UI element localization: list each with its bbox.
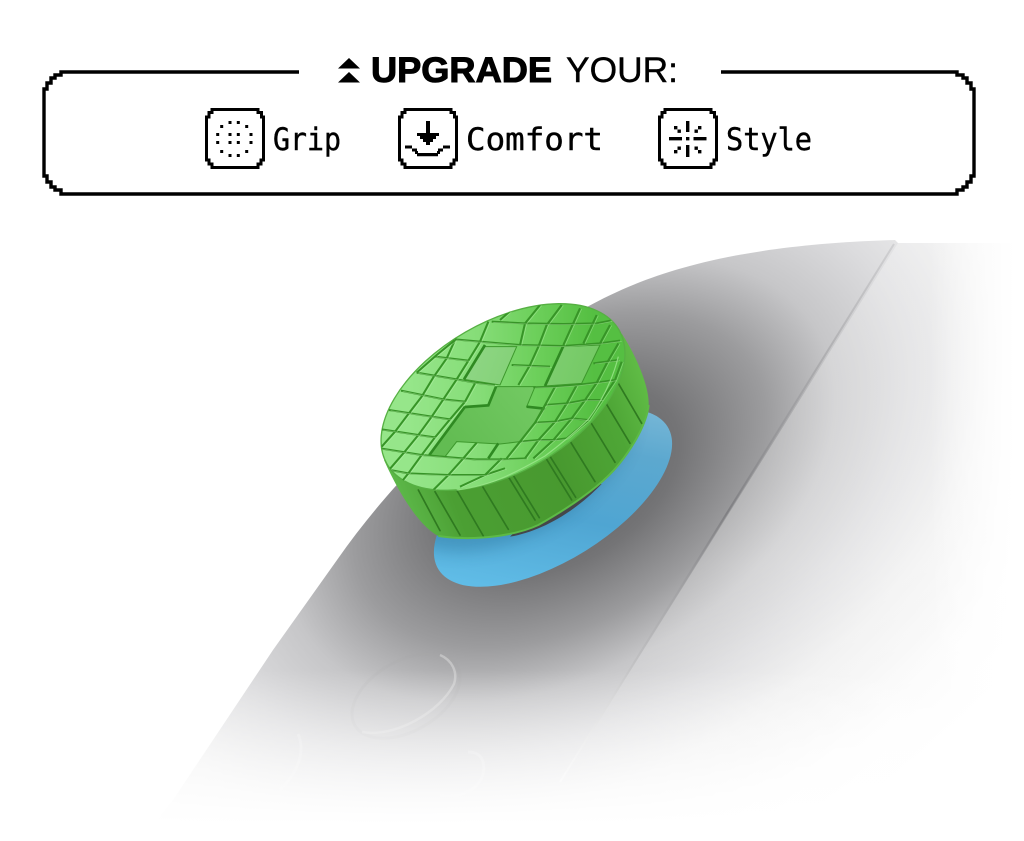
- dark stem sliver: [510, 484, 602, 537]
- infographic canvas: [42, 56, 976, 784]
- rim highlight: [457, 357, 618, 490]
- blue thumbstick base: [434, 412, 672, 587]
- grip top face: [380, 303, 625, 491]
- creeper left eye: [464, 345, 517, 385]
- title: UPGRADE: [371, 51, 552, 90]
- bottom and right fades: [100, 235, 1024, 841]
- title: YOUR:: [566, 51, 678, 90]
- creeper right eye: [545, 345, 600, 386]
- label: comfort: Comfort: [466, 122, 603, 158]
- side bottom rim: [438, 405, 649, 538]
- controller body: [100, 235, 1024, 841]
- panel groove line: [560, 244, 894, 782]
- icon: grip: [206, 110, 264, 168]
- icon: comfort: [400, 110, 456, 168]
- label: grip: Grip: [273, 122, 341, 158]
- face button: [337, 636, 475, 756]
- green creeper thumb grip: [380, 303, 650, 540]
- creeper mouth: [429, 387, 545, 458]
- grip side wall: [384, 334, 649, 538]
- lower buttons: [280, 734, 484, 796]
- tile grid lines: [380, 305, 623, 491]
- side ribs: [418, 382, 642, 536]
- icon: double up arrow: [338, 58, 360, 82]
- label: style: Style: [726, 122, 812, 158]
- tile grid highlights: [382, 306, 623, 491]
- right panel lighter area: [524, 243, 1024, 841]
- header frame: [44, 72, 974, 194]
- icon: style: [660, 110, 716, 168]
